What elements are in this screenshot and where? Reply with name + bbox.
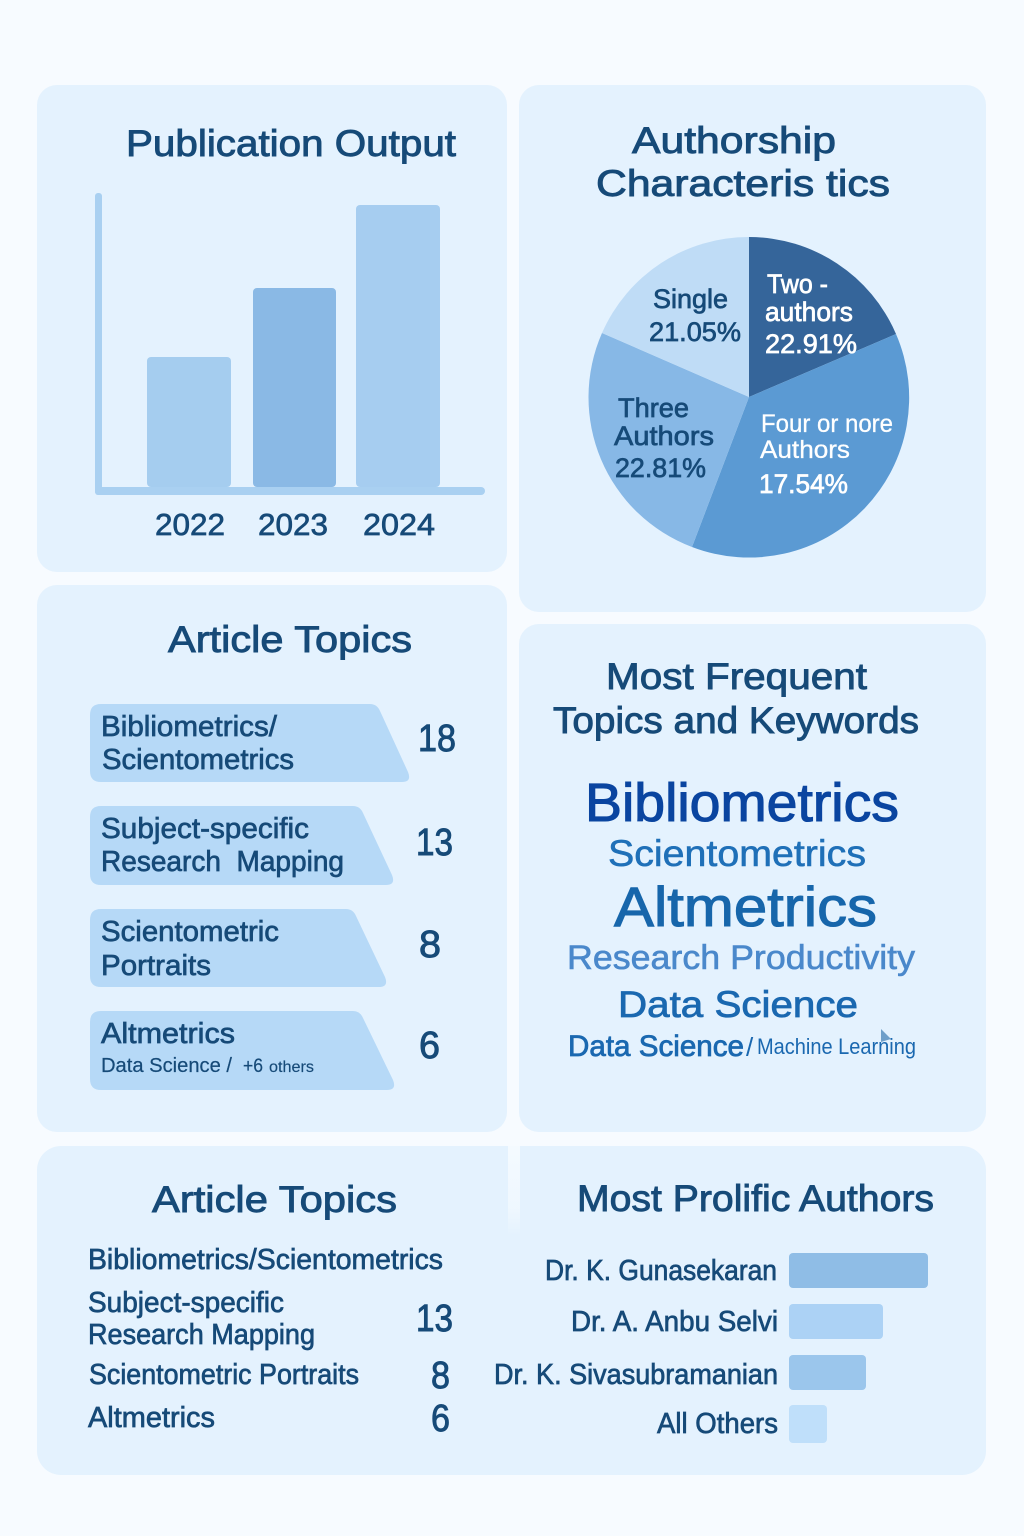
panel: publication output	[37, 85, 507, 572]
panel: bottom summary	[37, 1146, 986, 1475]
topic row: altmetrics: Altmetrics	[101, 1018, 235, 1050]
heading: most frequent topics and keywords: Topics and Keywords	[553, 700, 919, 741]
topic row: bibliometrics: Bibliometrics/	[101, 711, 278, 743]
heading: article topics: Article Topics	[168, 619, 412, 660]
heading: authorship characteristics: Characteris tics	[596, 163, 890, 204]
word cloud: Data Science	[618, 984, 858, 1025]
bar chart: publications by year: 2024	[363, 507, 435, 542]
topic row: scientometric portraits	[90, 909, 441, 987]
panel: authorship characteristics	[519, 85, 986, 612]
topic row: altmetrics: 6	[419, 1025, 440, 1067]
pie chart: authorship shares: Single	[653, 284, 728, 314]
heading: most frequent topics and keywords	[553, 656, 919, 741]
word cloud: Scientometrics	[608, 833, 866, 874]
topic row: scientometric portraits: Portraits	[101, 950, 211, 982]
word cloud: Altmetrics	[614, 875, 877, 938]
topic list: 8	[431, 1355, 450, 1397]
topic row: altmetrics: others	[269, 1059, 314, 1076]
topic list	[88, 1244, 453, 1440]
word cloud: Data Science	[568, 1030, 744, 1063]
panel: article topics ranked	[37, 585, 507, 1132]
bar chart: prolific authors: Dr. K. Sivasubramanian	[494, 1359, 778, 1391]
topic list: Scientometric Portraits	[89, 1359, 359, 1391]
bar chart: prolific authors: All Others	[657, 1408, 778, 1440]
topic row: scientometric portraits: Scientometric	[101, 916, 279, 948]
heading: authorship characteristics: Authorship	[632, 120, 836, 161]
pie chart: authorship shares: authors	[765, 297, 853, 327]
topic list: Research Mapping	[88, 1319, 315, 1351]
bar chart: publications by year	[95, 193, 485, 542]
topic row: altmetrics: +6	[243, 1056, 263, 1077]
topic row: subject-specific: Subject-specific	[101, 813, 309, 845]
heading: publication output: Publication Output	[126, 123, 457, 164]
topic row: altmetrics: Data Science /	[101, 1055, 232, 1077]
bar chart: publications by year: 2022	[155, 507, 225, 542]
topic row: subject-specific: Research Mapping	[101, 846, 344, 878]
pie chart: authorship shares: 22.81%	[615, 453, 706, 483]
word cloud: Bibliometrics	[585, 773, 899, 833]
topic list: Subject-specific	[88, 1287, 284, 1319]
bar chart: prolific authors	[494, 1253, 928, 1443]
bar chart: prolific authors: Dr. A. Anbu Selvi	[571, 1306, 778, 1338]
topic list: 6	[431, 1398, 450, 1440]
pie chart: authorship shares: Three	[618, 393, 689, 423]
word cloud: Machine Learning	[757, 1034, 916, 1059]
heading: most prolific authors: Most Prolific Authors	[577, 1178, 934, 1219]
topic row: scientometric portraits: 8	[419, 924, 441, 966]
topic list: Bibliometrics/Scientometrics	[88, 1244, 443, 1276]
topic row: bibliometrics: 18	[418, 718, 456, 760]
topic list: 13	[416, 1298, 453, 1340]
topic row: subject-specific	[90, 806, 453, 885]
topic row: subject-specific: 13	[416, 822, 453, 864]
pie chart: authorship shares: 17.54%	[759, 469, 848, 499]
word cloud: /	[746, 1032, 754, 1062]
pie chart: authorship shares: 22.91%	[765, 329, 857, 359]
icon: cursor mark	[881, 1029, 891, 1042]
word cloud	[567, 773, 916, 1063]
heading: most frequent topics and keywords: Most Frequent	[606, 656, 868, 697]
topic row: bibliometrics	[90, 704, 456, 782]
heading: authorship characteristics	[596, 120, 890, 204]
pie chart: authorship shares	[589, 237, 909, 558]
pie chart: authorship shares: 21.05%	[649, 317, 741, 347]
panel: most frequent topics and keywords	[519, 624, 986, 1132]
topic row: bibliometrics: Scientometrics	[102, 744, 294, 776]
word cloud: Research Productivity	[567, 939, 915, 977]
topic list: Altmetrics	[88, 1402, 215, 1434]
pie chart: authorship shares: Authors	[760, 436, 850, 464]
heading: article topics summary: Article Topics	[152, 1179, 397, 1220]
pie chart: authorship shares: Four or nore	[761, 410, 893, 438]
topic row: altmetrics	[90, 1011, 440, 1090]
pie chart: authorship shares: Two -	[767, 269, 828, 299]
bar chart: prolific authors: Dr. K. Gunasekaran	[545, 1255, 777, 1287]
pie chart: authorship shares: Authors	[614, 421, 714, 451]
bar chart: publications by year: 2023	[258, 507, 328, 542]
